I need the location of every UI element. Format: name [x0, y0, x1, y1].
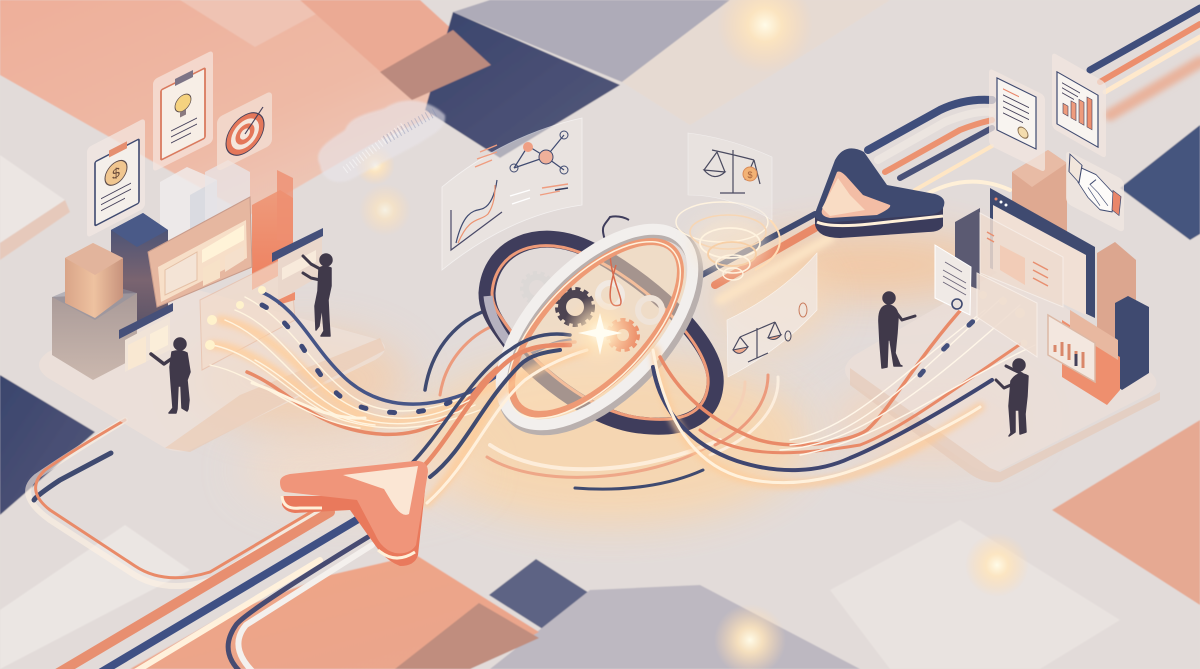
- bottom arrow belts and left loop: [28, 420, 372, 669]
- right small document: [935, 245, 971, 315]
- left platform: [39, 285, 385, 452]
- center flows to right side: [653, 291, 1035, 484]
- person: right rear: [879, 292, 915, 368]
- person: left front: [151, 338, 190, 413]
- person: left rear: [303, 254, 332, 336]
- interior warm glow in ring: [484, 213, 716, 447]
- card: bar report: [1052, 52, 1106, 159]
- floor arcs around the knot: [425, 310, 778, 489]
- upper right conveyor belts: [700, 8, 1200, 300]
- left small windows: [119, 228, 323, 372]
- card: dollar clipboard: [87, 118, 145, 238]
- vortex swirl: [676, 202, 780, 280]
- card: idea clipboard: [153, 50, 213, 172]
- card: balance scale: [727, 253, 817, 377]
- card: scale with coin: [688, 133, 772, 220]
- card: line chart and network: [442, 118, 582, 270]
- right platform: [845, 265, 1160, 482]
- ambient warm glows: [190, 0, 1030, 669]
- card: scale with coin: $: [747, 170, 753, 180]
- right small bar chart panel: [1048, 315, 1095, 382]
- coral arrow marker: [280, 461, 428, 566]
- card: dollar clipboard: $: [112, 164, 121, 184]
- center flows to lower arrow: [410, 334, 587, 503]
- left data fibers: [205, 286, 575, 434]
- right navy screen: [990, 188, 1095, 318]
- gears: [522, 216, 662, 350]
- dark knot loop: [487, 239, 715, 426]
- card: target: [217, 90, 272, 172]
- card: handshake: [1066, 150, 1124, 233]
- right glass panels: [977, 213, 1063, 357]
- right chart bars: [955, 150, 1149, 405]
- person: right front: [996, 359, 1028, 436]
- white ring: [468, 196, 729, 461]
- card: document: [989, 68, 1045, 172]
- left chart bars: [52, 160, 293, 380]
- navy arrow marker: [815, 148, 944, 238]
- cloud: [318, 101, 445, 182]
- center spark: [562, 295, 638, 371]
- left dashboard screen: [148, 197, 252, 307]
